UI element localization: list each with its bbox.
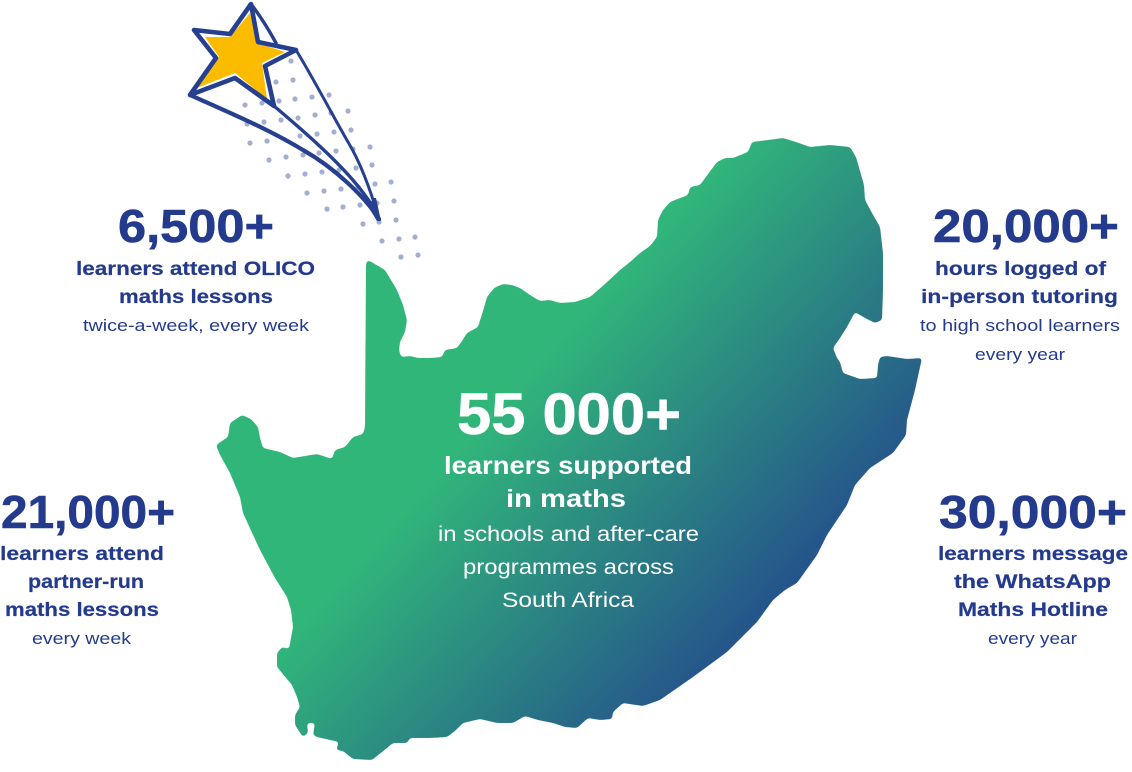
stat: 21,000+: 21,000+ [1, 486, 175, 538]
stat: 20,000+: every year [975, 345, 1065, 364]
stat: 20,000+ [920, 200, 1120, 364]
central stat: 55 000+: in schools and after-care [438, 522, 699, 546]
stat: 6,500+: 6,500+ [118, 200, 274, 252]
stat: 21,000+ [0, 486, 175, 648]
stat: 21,000+: partner-run [28, 571, 144, 593]
central stat: 55 000+ [438, 382, 699, 612]
star dots [242, 58, 421, 260]
stat: 20,000+: 20,000+ [933, 200, 1119, 252]
stat: 6,500+: maths lessons [119, 286, 273, 308]
stat: 30,000+: every year [988, 629, 1077, 648]
stat: 20,000+: to high school learners [920, 316, 1120, 335]
stat: 30,000+ [938, 486, 1128, 648]
star outline and tail [190, 4, 381, 221]
stat: 30,000+: 30,000+ [939, 486, 1127, 538]
stat: 6,500+: learners attend OLICO [76, 258, 315, 280]
central stat: 55 000+: in maths [506, 485, 626, 513]
star fill [197, 13, 285, 99]
stat: 6,500+ [76, 200, 315, 335]
central stat: 55 000+: South Africa [502, 588, 634, 612]
stat: 21,000+: every week [32, 629, 132, 648]
central stat: 55 000+: learners supported [444, 452, 692, 480]
stat: 21,000+: learners attend [0, 543, 164, 565]
stat: 21,000+: maths lessons [5, 599, 159, 621]
stat: 30,000+: Maths Hotline [958, 599, 1108, 621]
stat: 20,000+: in-person tutoring [921, 286, 1118, 308]
central stat: 55 000+: programmes across [463, 555, 674, 579]
stat: 6,500+: twice-a-week, every week [83, 316, 310, 335]
stat: 30,000+: learners message [938, 543, 1128, 565]
central stat: 55 000+: 55 000+ [457, 382, 681, 447]
stat: 20,000+: hours logged of [935, 258, 1107, 280]
stat: 30,000+: the WhatsApp [954, 571, 1111, 593]
map of South Africa [216, 138, 922, 760]
shooting star [190, 4, 421, 260]
